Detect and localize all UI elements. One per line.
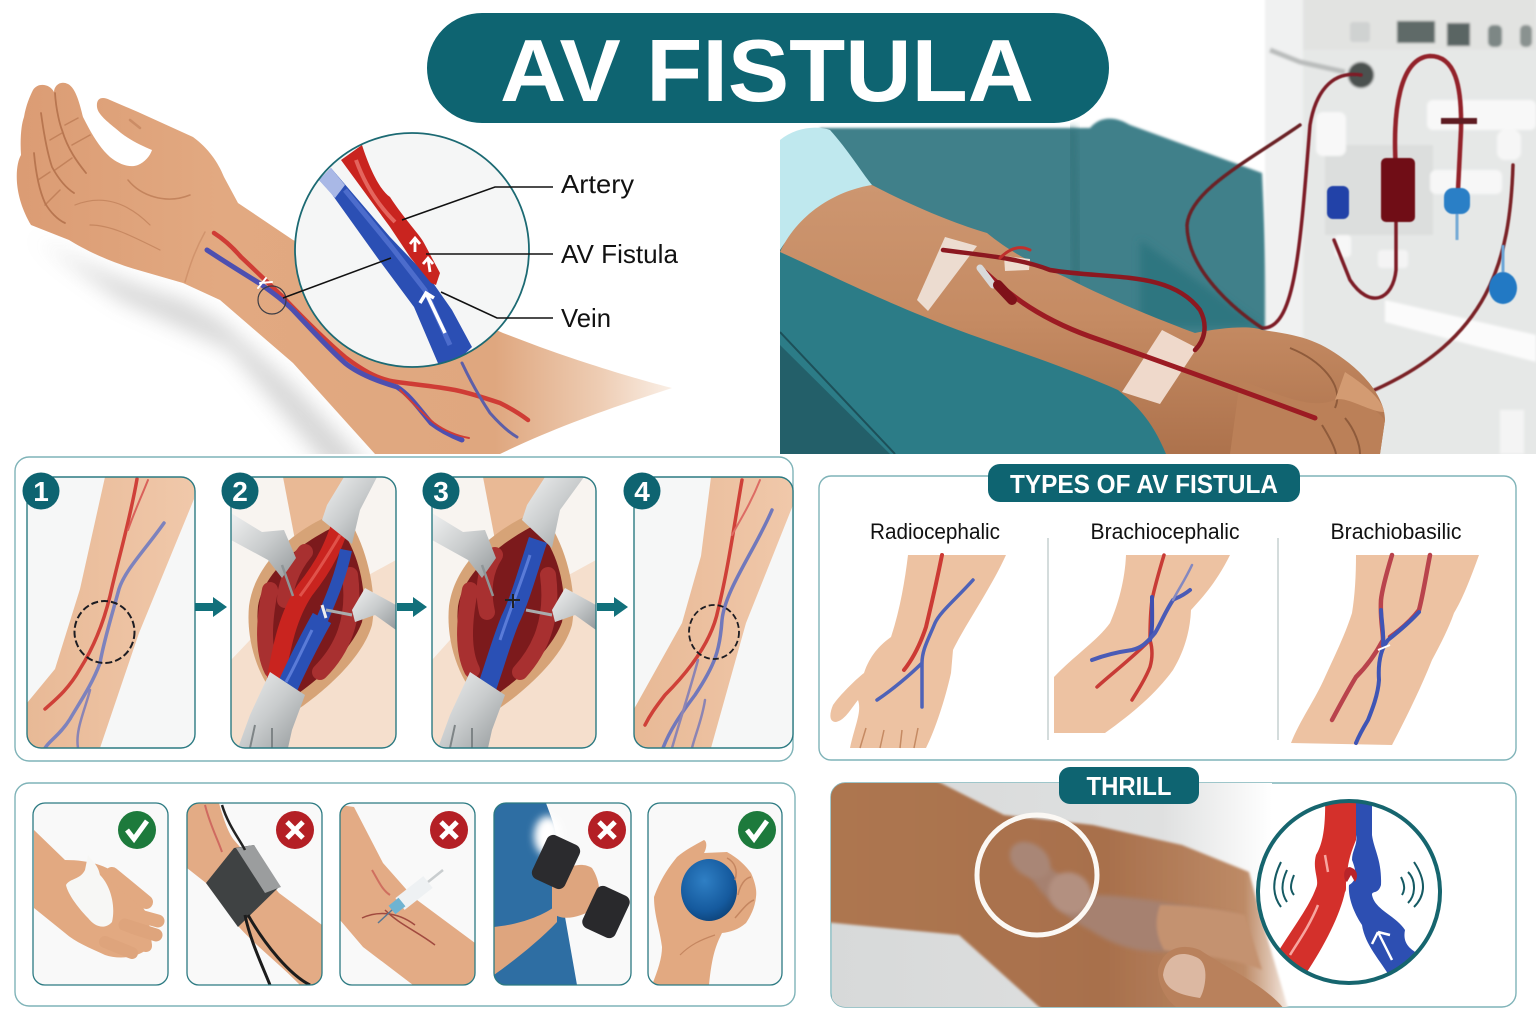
type: brachiobasilic: [1291, 519, 1479, 745]
icon: red cross 1: [276, 811, 314, 849]
highlight circle on fistula: [977, 815, 1097, 935]
arrow 1 to 2: [195, 597, 227, 617]
care: no heavy lifting: [494, 803, 632, 985]
medical tape: [917, 237, 1197, 404]
step 3: vein joined over artery: [432, 477, 596, 748]
drip chambers: [1327, 118, 1517, 304]
step 1 badge: 1: [33, 476, 49, 507]
step 2: exposed artery and vein: [231, 477, 396, 748]
illustration: forearm with AV fistula: [17, 83, 679, 470]
dividers: [1048, 538, 1278, 740]
care: no needle in fistula arm: [340, 803, 475, 985]
care: no blood pressure cuff: [187, 803, 322, 985]
icon: red cross 3: [588, 811, 626, 849]
dialysis chair seat: [780, 242, 1166, 454]
icon: green check: [118, 811, 156, 849]
leader line to magnifier: [283, 258, 391, 298]
care: moisturise skin: [33, 803, 168, 985]
photo: palpating the fistula: [825, 775, 1290, 1015]
label: Artery: Artery: [561, 169, 634, 199]
type: brachiobasilic: Brachiobasilic: [1330, 519, 1462, 544]
panel: types of AV fistula: [819, 464, 1516, 760]
title banner: AV FISTULA: [500, 21, 1034, 120]
dialysis machine: [1265, 0, 1536, 459]
arrow 3 to 4: [597, 597, 628, 617]
type: brachiocephalic: [1054, 519, 1240, 733]
panel: surgical procedure steps: [15, 457, 793, 761]
patient sleeve: [780, 128, 872, 250]
icon: green check 2: [738, 811, 776, 849]
icon: vibration waves right: [1401, 862, 1423, 907]
patient palm and fingers: [1230, 348, 1385, 454]
heading: thrill: THRILL: [1086, 771, 1172, 801]
care: squeeze stress ball: [648, 803, 782, 985]
dialysis chair backrest: [800, 119, 1270, 340]
heading: thrill: [1059, 767, 1199, 804]
title banner: [426, 12, 1110, 124]
forearm vessels: [207, 233, 528, 440]
step 4 badge: 4: [634, 476, 650, 507]
photo: dialysis treatment: [780, 0, 1536, 459]
step 3 badge: [422, 472, 460, 510]
type: radiocephalic: [830, 519, 1006, 748]
step 2 badge: [222, 472, 258, 510]
step 4 badge: [624, 472, 660, 510]
tubing on arm: [943, 248, 1315, 418]
magnifier: artery vein junction: [295, 133, 529, 375]
marker: small fistula circle: [258, 286, 286, 314]
label: Vein: Vein: [561, 303, 611, 333]
heading: types of AV fistula: TYPES OF AV FISTULA: [1010, 469, 1278, 499]
type: radiocephalic: Radiocephalic: [870, 519, 1000, 544]
step 2 badge: 2: [232, 476, 248, 507]
label: Vein: [440, 291, 610, 328]
icon: red cross 2: [430, 811, 468, 849]
step 1: before surgery forearm: [27, 477, 195, 748]
patient arm and hand: [780, 185, 1385, 454]
forearm and hand: [17, 83, 672, 454]
panel: thrill: [825, 767, 1516, 1015]
magnifier: turbulent flow: [1258, 795, 1440, 983]
arrow 2 to 3: [397, 597, 427, 617]
soft shadow under arm: [65, 255, 366, 454]
step 1 badge: [22, 472, 60, 510]
step 3 badge: 3: [433, 476, 449, 507]
icon: vibration waves left: [1274, 862, 1294, 907]
blood lines on machine: [1187, 56, 1513, 392]
type: brachiocephalic: Brachiocephalic: [1090, 519, 1240, 544]
finger and palm creases: [34, 93, 205, 282]
step 4: healed fistula forearm: [634, 477, 793, 748]
panel: fistula care dos and don'ts: [15, 783, 795, 1006]
label: Artery: [402, 169, 634, 220]
label: AV Fistula: AV Fistula: [561, 239, 679, 269]
